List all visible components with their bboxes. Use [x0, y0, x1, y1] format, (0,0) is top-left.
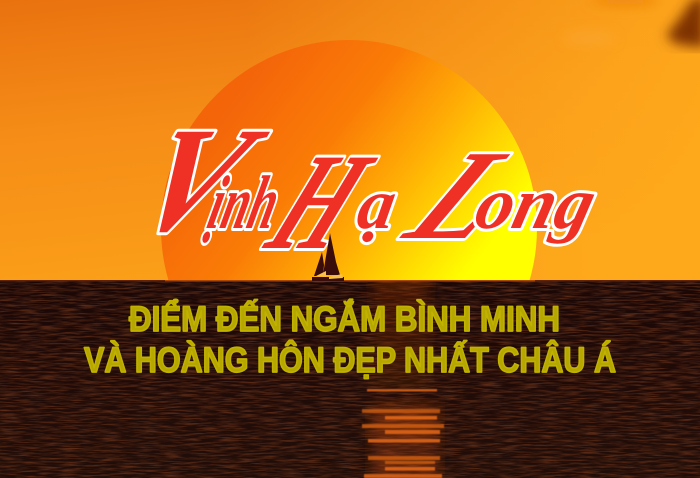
sea	[0, 270, 700, 478]
title: Vịnh Hạ Long	[110, 97, 604, 278]
sun disc	[161, 40, 537, 416]
sky background	[0, 0, 700, 281]
subtitle	[84, 299, 616, 380]
subtitle: VÀ HOÀNG HÔN ĐẸP NHẤT CHÂU Á	[84, 340, 616, 380]
title: Vịnh Hạ Long: V	[110, 97, 286, 263]
title: Vịnh Hạ Long: H	[246, 125, 395, 278]
title: Vịnh Hạ Long: ịnh	[200, 160, 288, 245]
sun reflection on water	[362, 389, 444, 478]
clouds, top right	[564, 0, 700, 48]
title: Vịnh Hạ Long: ong	[468, 163, 604, 245]
subtitle: ĐIỂM ĐẾN NGẮM BÌNH MINH	[129, 299, 560, 339]
title: Vịnh Hạ Long: ạ	[352, 163, 402, 244]
sailboat	[312, 233, 344, 281]
title: Vịnh Hạ Long: L	[379, 124, 553, 266]
